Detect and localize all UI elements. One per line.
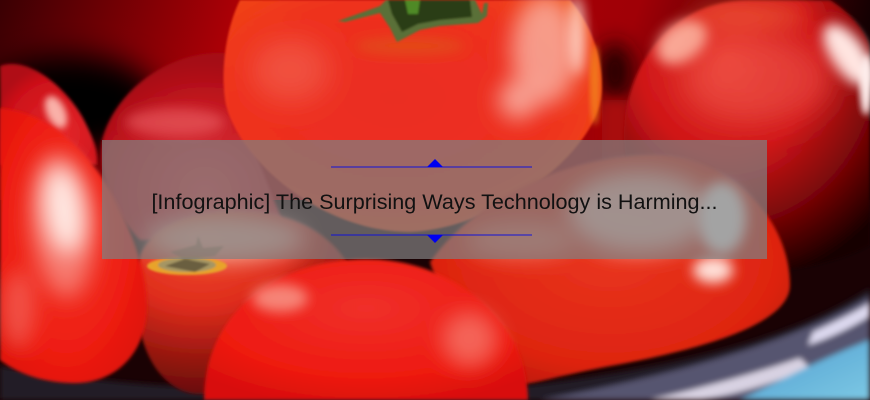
tomato: right	[624, 0, 870, 270]
tomato: middle left with stem scar	[136, 211, 352, 394]
tomato: large left	[0, 108, 147, 383]
tomato: lower right	[430, 155, 790, 384]
tomato: top center	[224, 0, 602, 232]
bottom divider with down arrow	[331, 234, 532, 243]
title banner	[102, 140, 767, 259]
tomato: bottom center	[204, 259, 528, 400]
bowl rim	[0, 288, 870, 400]
tomato stem	[338, 0, 488, 42]
stem scar	[147, 236, 227, 275]
title text: [Infographic] The Surprising Ways Technology is Harming...	[151, 189, 718, 214]
tomato: far left	[0, 64, 97, 165]
top divider with up arrow	[331, 159, 532, 168]
tomato: back	[101, 53, 290, 240]
